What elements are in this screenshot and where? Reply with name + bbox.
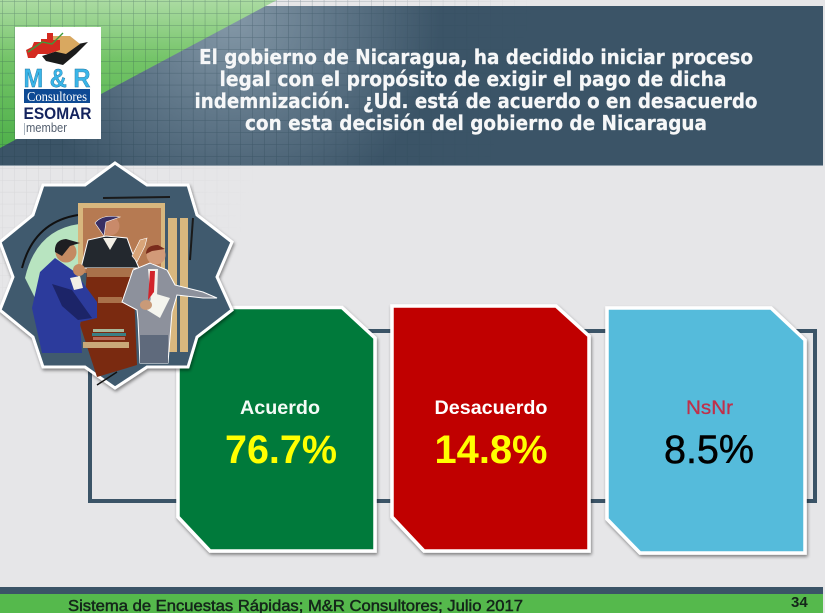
value: 14.8%: 14.8% [434,428,548,472]
card: Desacuerdo [392,306,589,551]
icon: logo briefcase and chart [26,33,88,65]
value: 8.5%: 8.5% [664,428,754,472]
page number: 34 [791,594,808,611]
label: NsNr: NsNr [686,398,734,419]
question heading [194,45,758,135]
judge [81,216,147,268]
label: Desacuerdo: Desacuerdo [434,397,548,419]
logo text: member: member [26,121,67,135]
card: Acuerdo [178,308,375,551]
logo: M&R Consultores ESOMAR member [15,27,101,139]
lawyer in grey suit [122,245,217,363]
header band [0,0,823,166]
light grid background [0,166,193,270]
star background [0,163,232,388]
bench [80,268,137,385]
footer [0,587,823,613]
logo text: Consultores: Consultores [27,90,87,105]
label: Acuerdo: Acuerdo [240,397,320,419]
card: NsNr [607,308,805,553]
question heading: El gobierno de Nicaragua, ha decidido iniciar proceso [199,45,753,69]
courtroom back panel [22,197,193,352]
question heading: con esta decisión del gobierno de Nicaragua [245,111,707,135]
question heading: indemnización. ¿Ud. está de acuerdo o en desacuerdo [194,89,758,113]
logo text: ESOMAR: ESOMAR [24,104,92,123]
question heading: legal con el propósito de exigir el pago de dicha [220,67,726,91]
icon: courtroom star badge [0,163,232,388]
lawyer in blue suit [32,239,97,353]
value: 76.7%: 76.7% [225,428,337,472]
connector frame [90,331,815,501]
logo text: M & R: M & R [24,63,91,93]
